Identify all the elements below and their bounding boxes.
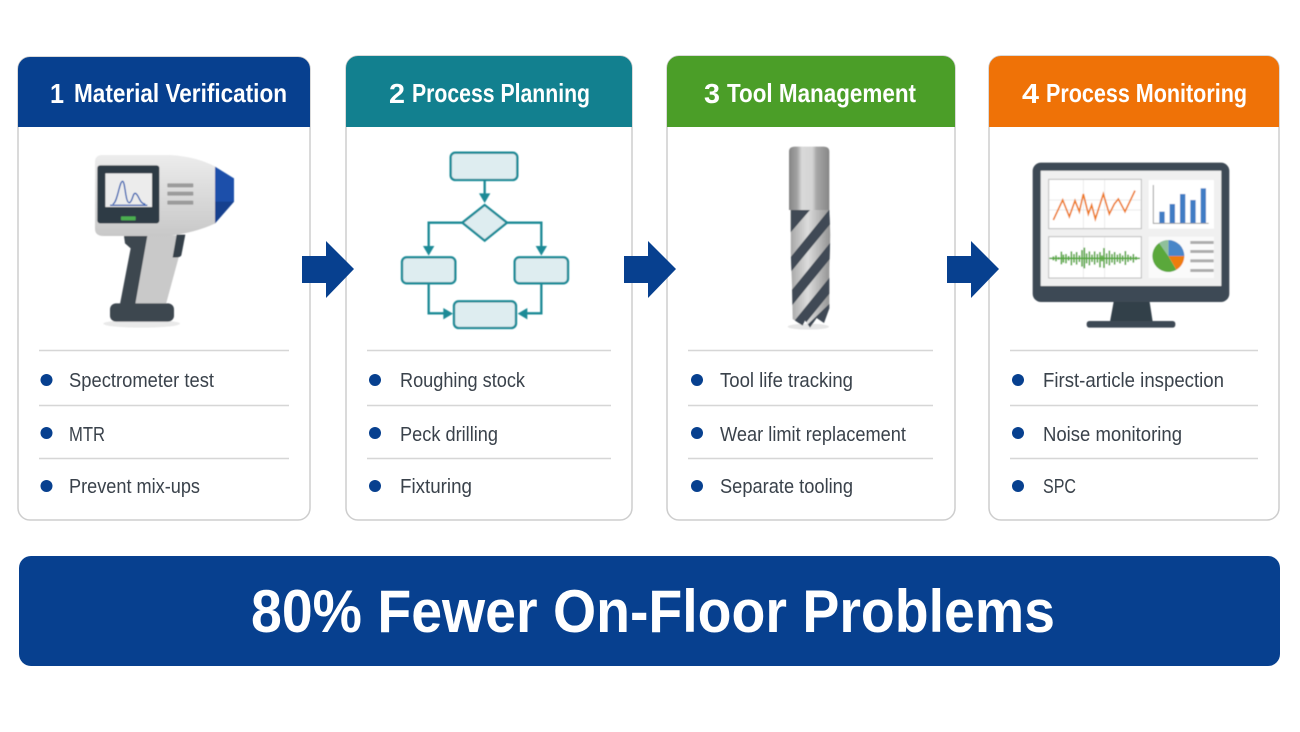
list item: wear limit replacement: Wear limit replacement — [720, 424, 906, 446]
list item: prevent mix-ups: Prevent mix-ups — [69, 476, 200, 498]
list item: noise monitoring: Noise monitoring — [1043, 424, 1182, 446]
header: process monitoring: Process Monitoring — [1046, 78, 1247, 108]
panel: tool management — [667, 56, 955, 520]
header: process monitoring — [989, 56, 1279, 127]
icon: handheld spectrometer — [95, 155, 234, 328]
panel: process planning — [346, 56, 632, 520]
header: process monitoring: 4 — [1022, 78, 1039, 109]
icon: monitoring dashboard — [1033, 163, 1229, 328]
list item: first-article inspection: First-article inspection — [1043, 370, 1224, 392]
header: material verification: 1 — [50, 78, 64, 109]
arrow: step 1 to 2 — [302, 241, 354, 298]
header: tool management — [667, 56, 955, 127]
header: tool management: Tool Management — [727, 78, 916, 108]
list item: tool life tracking: Tool life tracking — [720, 370, 853, 392]
header: tool management: 3 — [704, 78, 720, 109]
list item: roughing stock: Roughing stock — [400, 370, 526, 392]
list item: fixturing — [369, 476, 472, 498]
header: process planning: Process Planning — [412, 78, 590, 108]
list item: SPC — [1012, 476, 1076, 498]
list item: SPC: SPC — [1043, 476, 1076, 498]
list item: fixturing: Fixturing — [400, 476, 472, 498]
list item: MTR: MTR — [69, 424, 105, 446]
arrow: step 2 to 3 — [624, 241, 676, 298]
panel: material verification — [18, 57, 310, 520]
panel: process monitoring — [989, 56, 1279, 520]
icon: end mill — [788, 147, 832, 344]
header: process planning: 2 — [389, 78, 405, 109]
arrow: step 3 to 4 — [947, 241, 999, 298]
banner headline: 80% Fewer On-Floor Problems — [251, 578, 1055, 645]
banner: result — [19, 556, 1280, 666]
list item: separate tooling: Separate tooling — [720, 476, 853, 498]
list item: spectrometer test: Spectrometer test — [69, 370, 214, 392]
list item: peck drilling: Peck drilling — [400, 424, 498, 446]
list item: MTR — [40, 424, 105, 446]
header: process planning — [346, 56, 632, 127]
icon: flowchart — [402, 153, 568, 328]
header: material verification: Material Verification — [74, 78, 287, 108]
header: material verification — [18, 57, 310, 127]
